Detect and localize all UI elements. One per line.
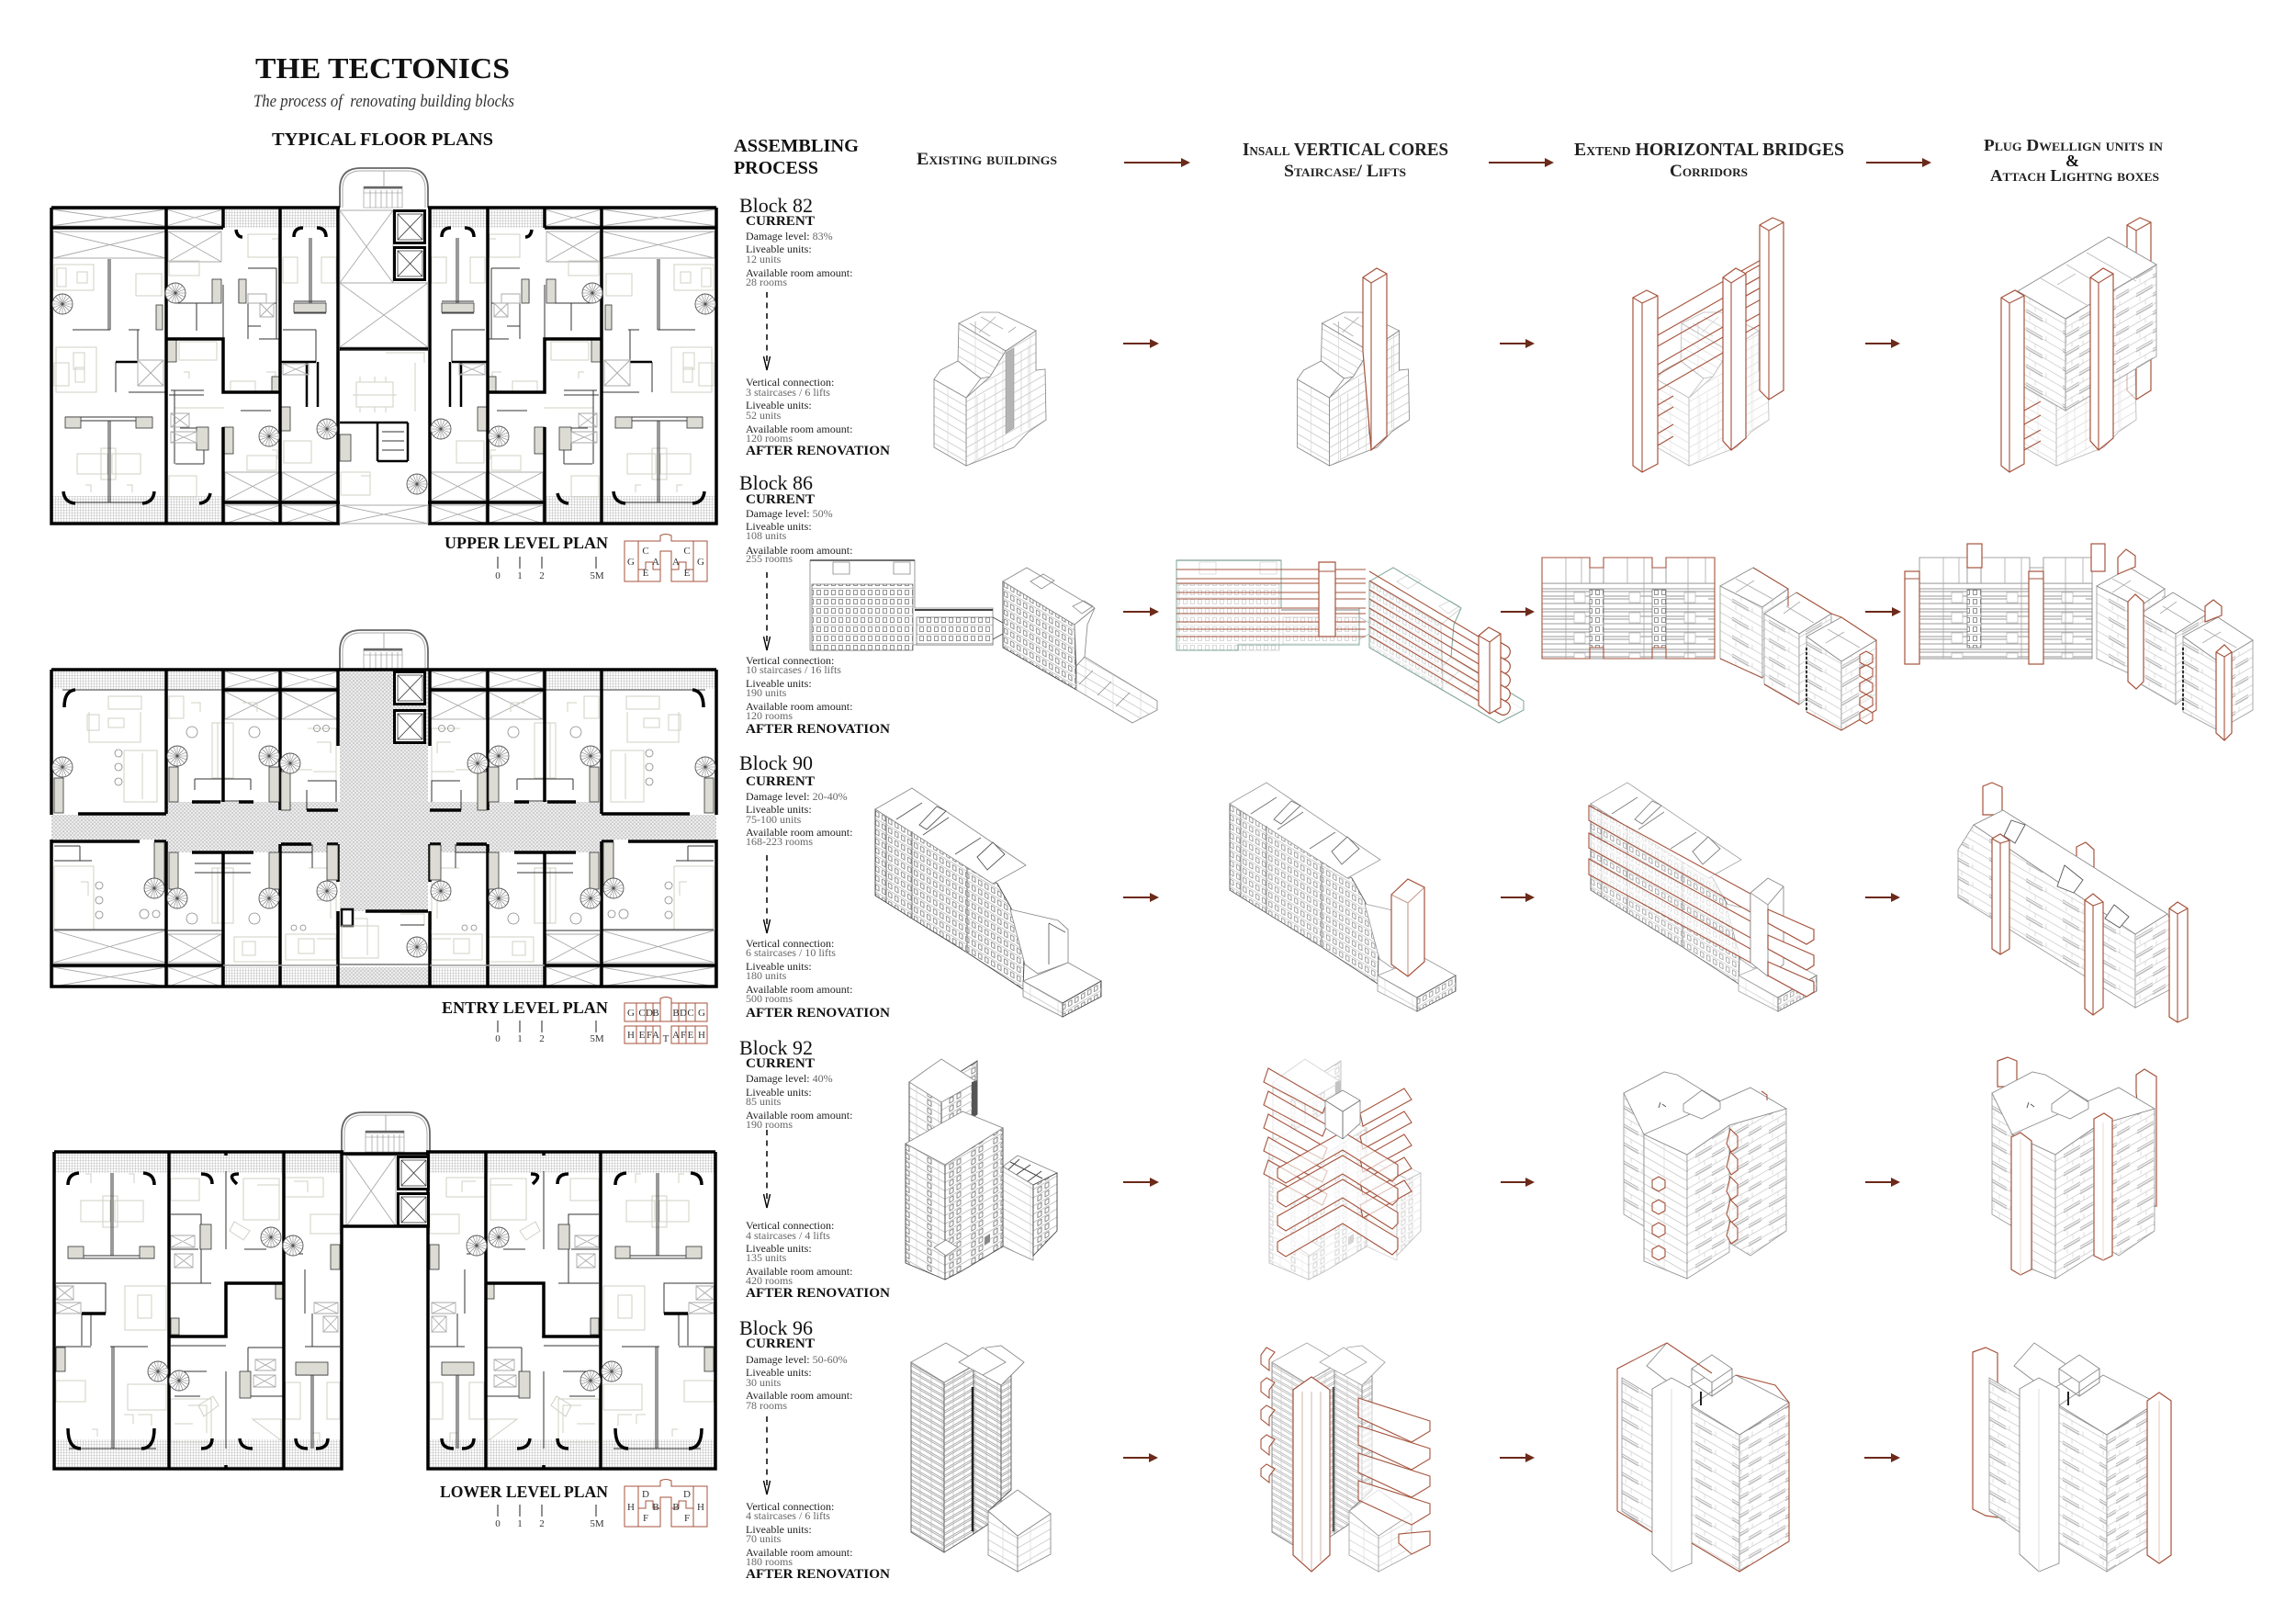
block 82 data: Vertical connection: [746, 376, 834, 389]
block 90 data: Liveable units: [746, 803, 812, 816]
block 90 data: Block 90 [739, 751, 813, 774]
column heading: plug dwelling units: Attach Lightng boxes [1990, 166, 2159, 185]
column heading: vertical cores [1243, 140, 1448, 181]
block 82 data: AFTER RENOVATION [746, 444, 890, 458]
block 96 data: 30 units [746, 1376, 782, 1389]
key plan: upper: C [683, 546, 691, 557]
block 82: existing building [934, 312, 1046, 466]
block 86 data: Block 86 [739, 471, 813, 494]
heading: assembling process: ASSEMBLING [734, 136, 859, 156]
subtitle: The process of renovating building blocks [253, 92, 514, 111]
block 90 data [739, 751, 890, 1021]
key plan: upper: G [697, 557, 704, 568]
block 92 data: AFTER RENOVATION [746, 1286, 890, 1301]
block 90 data: 6 staircases / 10 lifts [746, 946, 836, 959]
column heading: vertical cores: Insall VERTICAL CORES [1243, 140, 1448, 160]
scale bar: lower: 0 [495, 1518, 501, 1529]
key plan: upper: A [672, 557, 680, 568]
column heading: horizontal bridges: Extend HORIZONTAL BRIDGES [1574, 140, 1844, 160]
block 96 data: Available room amount: [746, 1546, 852, 1559]
key plan: upper: E [643, 568, 649, 579]
scale bar: upper: 5M [590, 570, 604, 581]
block 96 data: Vertical connection: [746, 1500, 834, 1513]
block 82 data: Liveable units: [746, 399, 812, 412]
scale bar: upper: 1 [517, 570, 523, 581]
block 82: vertical core [1297, 268, 1409, 466]
block 86 data: Liveable units: [746, 520, 812, 533]
block 96 data: AFTER RENOVATION [746, 1567, 890, 1582]
block 96: existing building [911, 1343, 1051, 1572]
heading: typical floor plans: TYPICAL FLOOR PLANS [272, 130, 493, 150]
block 82: horizontal bridges [1633, 218, 1784, 472]
key plan: lower: H [697, 1502, 704, 1513]
block 82 data: 3 staircases / 6 lifts [746, 386, 830, 399]
key plan: upper [625, 535, 707, 581]
block 92 data: 4 staircases / 4 lifts [746, 1229, 830, 1242]
block 92: bridges to units [1624, 1072, 1786, 1279]
block 86 data: Vertical connection: [746, 654, 834, 667]
block 86 data: 190 units [746, 686, 787, 699]
block 90 data: 168-223 rooms [746, 835, 813, 848]
block 92 data: 420 rooms [746, 1274, 793, 1287]
block 92 data: Available room amount: [746, 1109, 852, 1122]
block 90: horizontal bridges [1589, 783, 1817, 1011]
block 96 data: Liveable units: [746, 1523, 812, 1536]
key plan: entry: C [687, 1008, 694, 1019]
block 86: plug-in units [1905, 544, 2253, 740]
block 86: existing building [810, 560, 1157, 723]
key plan: entry: A [672, 1030, 680, 1041]
block 96 data: 4 staircases / 6 lifts [746, 1509, 830, 1522]
block 86 data: 108 units [746, 529, 787, 542]
block 92 data: Block 92 [739, 1036, 813, 1059]
block 90: plug-in units [1958, 783, 2188, 1022]
block 92 data: Liveable units: [746, 1242, 812, 1255]
block 96 data: Block 96 [739, 1316, 813, 1339]
block 92 data: Liveable units: [746, 1086, 812, 1099]
column heading: vertical cores: Staircase/ Lifts [1284, 162, 1406, 181]
column heading: existing buildings: Existing buildings [917, 150, 1057, 169]
scale bar: upper: 2 [539, 570, 545, 581]
key plan: entry: G [698, 1008, 705, 1019]
upper level plan label: UPPER LEVEL PLAN [445, 534, 608, 552]
key plan: entry: F [647, 1030, 652, 1041]
scale bar: lower [495, 1505, 604, 1529]
block 86 data: Damage level: 50% [746, 507, 833, 520]
key plan: lower: D [642, 1489, 649, 1500]
column heading: plug dwelling units: & [2065, 152, 2079, 170]
block 92: plug-in units [1992, 1057, 2156, 1279]
block 82 data: Available room amount: [746, 423, 852, 435]
block 82 data: Liveable units: [746, 242, 812, 255]
block 90 data: Liveable units: [746, 960, 812, 973]
key plan: entry: A [652, 1030, 659, 1041]
key plan: entry: D [680, 1008, 687, 1019]
column heading: horizontal bridges [1574, 140, 1844, 181]
scale bar: upper: 0 [495, 570, 501, 581]
block 90: vertical core [1230, 783, 1456, 1011]
key plan: entry: B [652, 1008, 659, 1019]
key plan: entry [625, 998, 707, 1044]
row arrows [1123, 339, 1901, 1462]
key plan: entry: T [663, 1033, 670, 1044]
block 90 data: 500 rooms [746, 992, 793, 1005]
block 82: plug-in units [2001, 218, 2156, 472]
block 96 data [739, 1316, 890, 1582]
scale bar: entry: 5M [590, 1033, 604, 1044]
key plan: upper: E [684, 568, 691, 579]
key plan: lower: F [643, 1513, 648, 1524]
block 86 data: 10 staircases / 16 lifts [746, 663, 841, 676]
scale bar: entry [495, 1021, 604, 1044]
scale bar: entry: 2 [539, 1033, 545, 1044]
key plan: lower: H [627, 1502, 635, 1513]
block 86 data: 255 rooms [746, 552, 793, 565]
block 82 data: 120 rooms [746, 432, 793, 445]
block 90: existing building [875, 788, 1101, 1017]
key plan: entry: D [646, 1008, 653, 1019]
block 96 data: 78 rooms [746, 1399, 787, 1412]
key plan: entry: H [698, 1030, 705, 1041]
block 92: existing building [906, 1059, 1057, 1280]
block 82 data: 12 units [746, 253, 782, 265]
column heading: plug dwelling units [1984, 136, 2164, 185]
block 86 data: AFTER RENOVATION [746, 722, 890, 737]
arrow [1124, 158, 1190, 167]
block 86: vertical core [1176, 560, 1524, 723]
scale bar: lower: 5M [590, 1518, 604, 1529]
column heading: plug dwelling units: Plug Dwellign units in [1984, 136, 2164, 154]
key plan: lower: F [684, 1513, 690, 1524]
block 96 data: 70 units [746, 1532, 782, 1545]
block 90 data: CURRENT [746, 774, 815, 789]
block 82 data [739, 194, 890, 458]
block 92 data: Damage level: 40% [746, 1072, 833, 1085]
key plan: entry: H [627, 1030, 635, 1041]
block 82 data: 52 units [746, 409, 782, 422]
block 96: vertical core and bridges [1261, 1343, 1430, 1572]
block 92 data: 85 units [746, 1095, 782, 1108]
key plan: entry: G [627, 1008, 635, 1019]
entry level plan label: ENTRY LEVEL PLAN [442, 998, 608, 1017]
block 82 data: CURRENT [746, 214, 815, 229]
scale bar: entry: 0 [495, 1033, 501, 1044]
block 82 data: 28 rooms [746, 276, 787, 288]
key plan: lower: D [683, 1489, 691, 1500]
key plan: lower: B [672, 1502, 680, 1513]
block 90 data: Available room amount: [746, 983, 852, 996]
block 96: bridges to units [1617, 1343, 1789, 1572]
block 90 data: 180 units [746, 969, 787, 982]
key plan: entry: C [638, 1008, 646, 1019]
lower level plan label: LOWER LEVEL PLAN [440, 1483, 608, 1501]
key plan: entry: E [688, 1030, 694, 1041]
block 92 data: CURRENT [746, 1056, 815, 1071]
block 90 data: Vertical connection: [746, 937, 834, 950]
block 90 data: 75-100 units [746, 813, 802, 826]
title: THE TECTONICS [255, 51, 510, 85]
key plan: entry: F [681, 1030, 686, 1041]
floor plan: entry level [51, 630, 716, 987]
scale bar: upper [495, 557, 604, 581]
block 96: plug-in units [1973, 1343, 2171, 1572]
block 96 data: CURRENT [746, 1336, 815, 1351]
scale bar: entry: 1 [517, 1033, 523, 1044]
block 96 data: Damage level: 50-60% [746, 1353, 848, 1366]
block 86: horizontal bridges [1542, 558, 1876, 730]
block 92 data: Available room amount: [746, 1265, 852, 1278]
block 86 data [739, 471, 890, 737]
column heading: horizontal bridges: Corridors [1670, 162, 1748, 181]
block 86 data: Liveable units: [746, 677, 812, 690]
scale bar: lower: 1 [517, 1518, 523, 1529]
arrow [1866, 158, 1931, 167]
block 92 data: Vertical connection: [746, 1219, 834, 1232]
block 86 data: CURRENT [746, 492, 815, 507]
block 92 data [739, 1036, 890, 1301]
block 86 data: Available room amount: [746, 544, 852, 557]
block 82 data: Damage level: 83% [746, 230, 833, 242]
key plan: lower: B [652, 1502, 659, 1513]
block 86 data: Available room amount: [746, 700, 852, 713]
block 82 data: Block 82 [739, 194, 813, 217]
block 90 data: Damage level: 20-40% [746, 790, 848, 803]
block 96 data: 180 rooms [746, 1555, 793, 1568]
key plan: entry: B [672, 1008, 680, 1019]
block 82 data: Available room amount: [746, 266, 852, 279]
block 90 data: AFTER RENOVATION [746, 1006, 890, 1021]
block 92 data: 190 rooms [746, 1118, 793, 1131]
key plan: upper: C [642, 546, 649, 557]
block 90 data: Available room amount: [746, 826, 852, 839]
heading: assembling process: PROCESS [734, 158, 818, 178]
arrow [1489, 158, 1554, 167]
block 96 data: Available room amount: [746, 1389, 852, 1402]
key plan: upper: G [627, 557, 635, 568]
scale bar: lower: 2 [539, 1518, 545, 1529]
key plan: entry: E [639, 1030, 646, 1041]
floor plan: lower level [54, 1112, 715, 1469]
key plan: upper: A [652, 557, 659, 568]
block 86 data: 120 rooms [746, 709, 793, 722]
block 92 data: 135 units [746, 1251, 787, 1264]
block 92: vertical core and bridges [1264, 1059, 1421, 1280]
heading: assembling process [734, 136, 859, 178]
key plan: lower [625, 1479, 707, 1527]
block 96 data: Liveable units: [746, 1366, 812, 1379]
floor plan: upper level [51, 168, 716, 524]
